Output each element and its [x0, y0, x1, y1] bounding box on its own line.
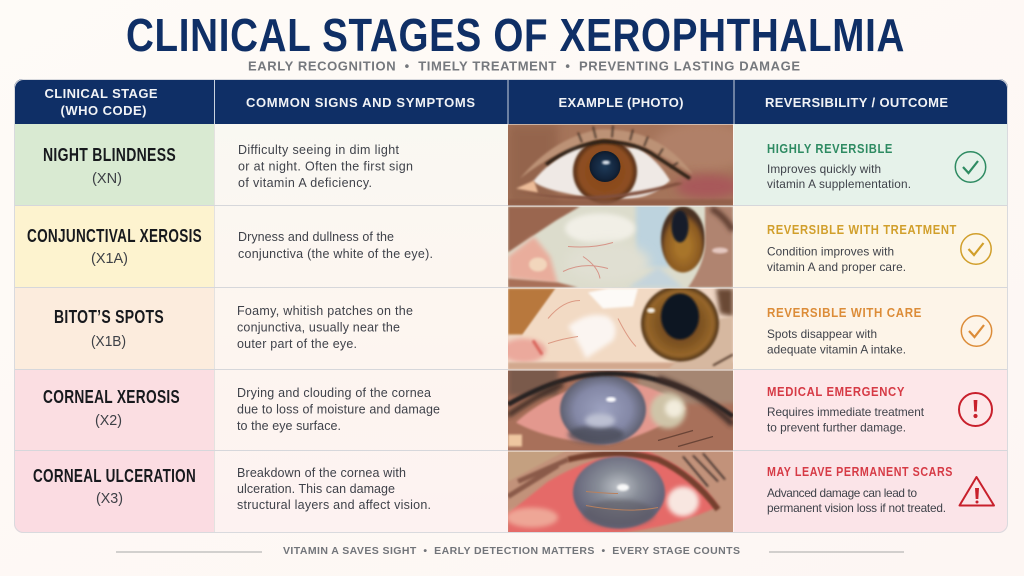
- photo: Bitot's spots eye: [502, 286, 733, 370]
- signs: conjunctival xerosis: [238, 230, 433, 261]
- stage names: [27, 145, 202, 507]
- signs: corneal xerosis: to the eye surface.: [237, 419, 341, 433]
- signs: night blindness: or at night. Often the first sign: [238, 160, 413, 174]
- stage: corneal ulceration: [34, 469, 195, 506]
- stage: corneal ulceration: CORNEAL ULCERATION: [33, 466, 196, 486]
- photo: corneal ulceration eye: [506, 450, 733, 536]
- signs: corneal ulceration: structural layers and affect vision.: [237, 498, 431, 512]
- icon: green check: [955, 152, 986, 182]
- outcome: reversible with treatment: vitamin A and proper care.: [767, 260, 906, 274]
- subtitle: EARLY RECOGNITION • TIMELY TREATMENT • PREVENTING LASTING DAMAGE: [248, 58, 800, 74]
- stage: Bitot's spots: [54, 310, 164, 349]
- outcome: highly reversible: vitamin A supplementation.: [767, 177, 911, 191]
- header row: EXAMPLE (PHOTO): [558, 95, 684, 110]
- stage: conjunctival xerosis: (X1A): [91, 250, 128, 267]
- signs: corneal ulceration: [237, 466, 431, 512]
- signs: corneal ulceration: ulceration. This can damage: [237, 482, 395, 496]
- outcome: reversible with treatment: REVERSIBLE WITH TREATMENT: [767, 222, 957, 237]
- signs: corneal ulceration: Breakdown of the cornea with: [237, 466, 406, 480]
- outcome: medical emergency: Requires immediate treatment: [767, 405, 925, 419]
- signs: corneal xerosis: [237, 386, 440, 433]
- header row: REVERSIBILITY / OUTCOME: [765, 95, 948, 110]
- outcome: permanent scars: Advanced damage can lead to: [767, 486, 917, 500]
- outcome: medical emergency: to prevent further damage.: [767, 420, 906, 434]
- signs: night blindness: Difficulty seeing in dim light: [238, 143, 400, 157]
- outcome: reversible with care: REVERSIBLE WITH CARE: [767, 305, 922, 320]
- stage: corneal xerosis: (X2): [95, 412, 122, 429]
- outcome: reversible with care: adequate vitamin A intake.: [767, 342, 906, 356]
- signs: Bitot's spots: [237, 304, 413, 351]
- outcome: permanent scars: MAY LEAVE PERMANENT SCARS: [767, 464, 953, 479]
- signs: corneal xerosis: due to loss of moisture and damage: [237, 402, 440, 416]
- stage: night blindness: (XN): [92, 170, 122, 187]
- header row: (WHO CODE): [60, 103, 146, 118]
- photo: night blindness eye: [508, 124, 733, 206]
- signs and symptoms: [237, 143, 440, 512]
- outcome: highly reversible: Improves quickly with: [767, 162, 881, 176]
- photo: corneal xerosis eye: [508, 366, 738, 450]
- outcome: reversible with treatment: Condition improves with: [767, 244, 894, 258]
- outcome: highly reversible: HIGHLY REVERSIBLE: [767, 141, 893, 156]
- outcome: reversible with treatment: [767, 222, 957, 274]
- outcomes: [767, 141, 957, 515]
- signs: Bitot's spots: Foamy, whitish patches on the: [237, 304, 413, 318]
- outcome: reversible with care: Spots disappear with: [767, 327, 877, 341]
- stage: Bitot's spots: (X1B): [91, 333, 126, 350]
- outcome: reversible with care: [767, 305, 922, 356]
- signs: Bitot's spots: outer part of the eye.: [237, 337, 357, 351]
- header row: COMMON SIGNS AND SYMPTOMS: [246, 95, 475, 110]
- outcome: permanent scars: [767, 464, 953, 515]
- stage: conjunctival xerosis: [28, 229, 202, 266]
- icon: yellow check: [961, 234, 991, 264]
- icon: orange check: [961, 316, 992, 346]
- outcome: medical emergency: MEDICAL EMERGENCY: [767, 384, 905, 399]
- header row: CLINICAL STAGE: [44, 86, 158, 101]
- stage: night blindness: NIGHT BLINDNESS: [43, 145, 176, 165]
- signs: conjunctival xerosis: Dryness and dullness of the: [238, 230, 394, 244]
- outcome: highly reversible: [767, 141, 911, 191]
- stage: night blindness: [44, 148, 176, 186]
- photo: conjunctival xerosis eye: [508, 202, 733, 288]
- stage: corneal xerosis: [44, 390, 180, 428]
- header row: [14, 79, 1008, 124]
- signs: night blindness: of vitamin A deficiency.: [238, 176, 372, 190]
- signs: conjunctival xerosis: conjunctiva (the white of the eye).: [238, 247, 433, 261]
- row tints: [14, 124, 1008, 533]
- footer text: VITAMIN A SAVES SIGHT • EARLY DETECTION MATTERS • EVERY STAGE COUNTS: [283, 545, 740, 557]
- stage: Bitot's spots: BITOT’S SPOTS: [54, 307, 164, 327]
- icon: warning triangle: [960, 477, 994, 506]
- outcome: medical emergency: [767, 384, 925, 434]
- stage: corneal ulceration: (X3): [96, 490, 123, 507]
- table panel: [14, 79, 1008, 536]
- stage: conjunctival xerosis: CONJUNCTIVAL XEROSIS: [27, 226, 202, 246]
- signs: corneal xerosis: Drying and clouding of the cornea: [237, 386, 431, 400]
- icon: exclamation circle: [959, 393, 992, 426]
- signs: Bitot's spots: conjunctiva, usually near the: [237, 320, 400, 334]
- stage: corneal xerosis: CORNEAL XEROSIS: [43, 387, 180, 407]
- outcome: permanent scars: permanent vision loss if not treated.: [767, 501, 946, 515]
- signs: night blindness: [238, 143, 413, 190]
